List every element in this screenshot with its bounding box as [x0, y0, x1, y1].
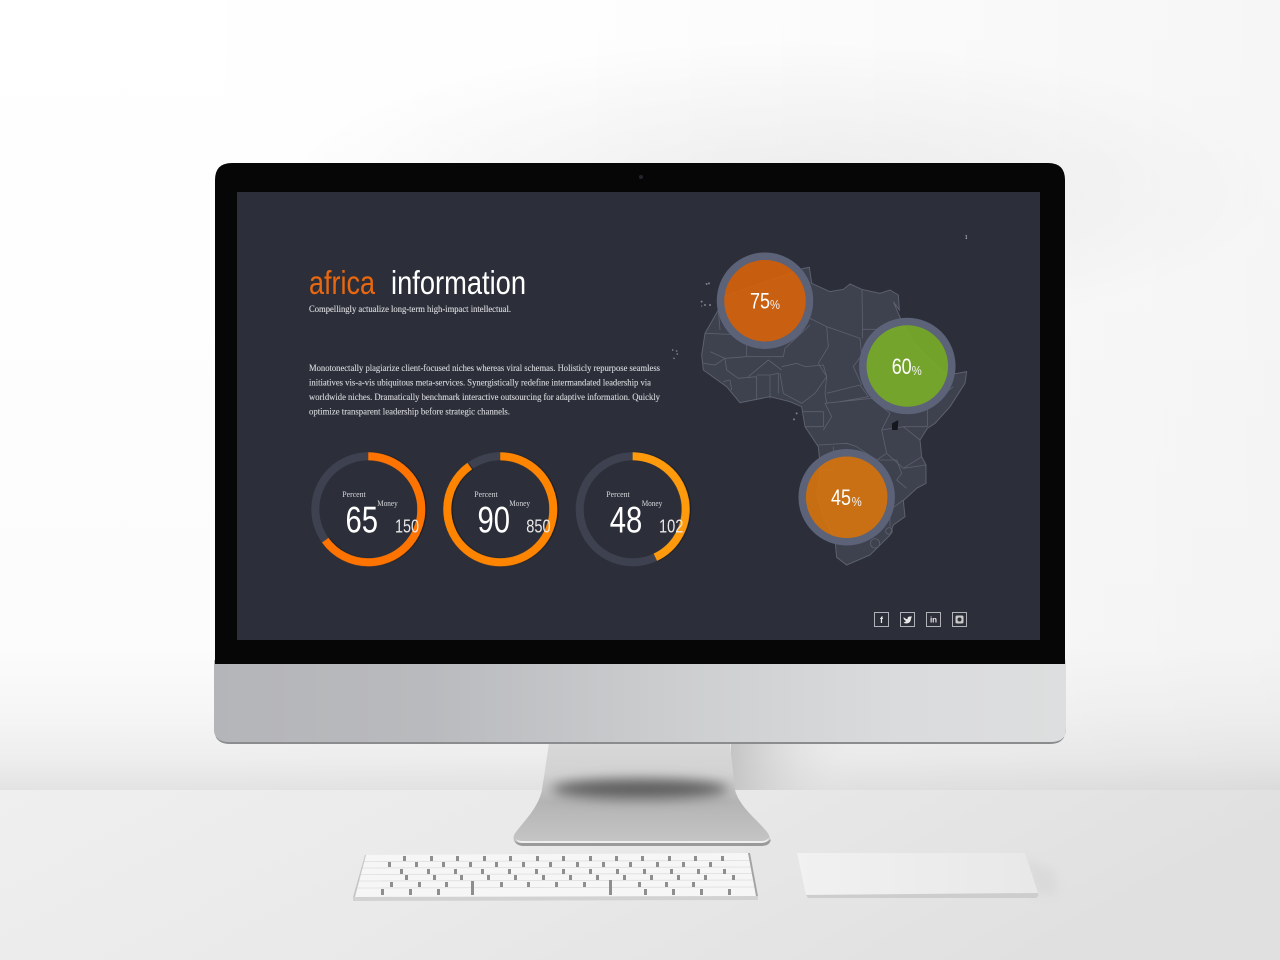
body paragraph: initiatives vis-a-vis ubiquitous meta-services. Synergistically redefine intermandated leadership via	[309, 378, 652, 388]
monitor bezel	[215, 163, 1065, 664]
callout: 75 percent	[720, 256, 810, 345]
map of Africa	[672, 267, 967, 565]
donut chart: 65 percent, 150 money: Money	[377, 499, 398, 508]
camera	[639, 175, 643, 179]
body paragraph	[309, 363, 660, 418]
icon: linkedin: in	[930, 616, 937, 624]
screen panel	[237, 192, 1040, 640]
body paragraph: worldwide niches. Dramatically benchmark interactive outsourcing for adaptive information. Quickly	[309, 392, 660, 403]
monitor stand	[514, 743, 771, 846]
donut chart: 48 percent, 102 money: 102	[659, 516, 683, 536]
icon: instagram	[952, 612, 966, 626]
donut chart: 90 percent, 850 money: 90	[478, 499, 510, 540]
title: africa	[309, 264, 376, 301]
title	[309, 264, 526, 301]
icon: twitter	[900, 612, 914, 626]
callout: 60 percent	[863, 322, 952, 410]
donut chart: 90 percent, 850 money: 850	[526, 516, 551, 536]
callout: 45 percent: 45	[831, 485, 851, 510]
donut chart: 48 percent, 102 money: 48	[610, 499, 642, 540]
donut chart: 48 percent, 102 money: Money	[642, 499, 662, 508]
callout: 45 percent	[802, 453, 891, 542]
monitor chin	[214, 660, 1066, 744]
donut chart: 90 percent, 850 money	[447, 456, 553, 562]
icon: linkedin	[926, 612, 940, 626]
donut chart: 48 percent, 102 money: Percent	[606, 490, 630, 499]
callout: 75 percent: %	[770, 297, 780, 312]
icon: facebook	[874, 612, 888, 626]
callout: 75 percent: 75	[750, 288, 770, 314]
page number: 1	[964, 234, 968, 241]
donut chart: 65 percent, 150 money: 65	[346, 499, 378, 540]
callout: 60 percent: 60	[892, 354, 912, 379]
donut chart: 65 percent, 150 money: Percent	[342, 490, 366, 499]
donut chart: 90 percent, 850 money: Money	[509, 499, 530, 508]
body paragraph: optimize transparent leadership before strategic channels.	[309, 406, 510, 418]
callout: 60 percent: %	[912, 363, 922, 378]
subtitle: Compellingly actualize long-term high-impact intellectual.	[309, 305, 511, 315]
callout: 45 percent: %	[852, 494, 862, 509]
donut chart: 90 percent, 850 money: Percent	[474, 490, 498, 499]
title: information	[391, 264, 526, 301]
body paragraph: Monotonectally plagiarize client-focused niches whereas viral schemas. Holisticly repurpose seamless	[309, 363, 660, 374]
icon: facebook: f	[880, 615, 884, 625]
donut chart: 48 percent, 102 money	[580, 456, 686, 562]
donut chart: 65 percent, 150 money	[315, 456, 421, 562]
donut chart: 65 percent, 150 money: 150	[395, 516, 419, 536]
keyboard	[353, 853, 758, 901]
trackpad	[797, 853, 1058, 898]
